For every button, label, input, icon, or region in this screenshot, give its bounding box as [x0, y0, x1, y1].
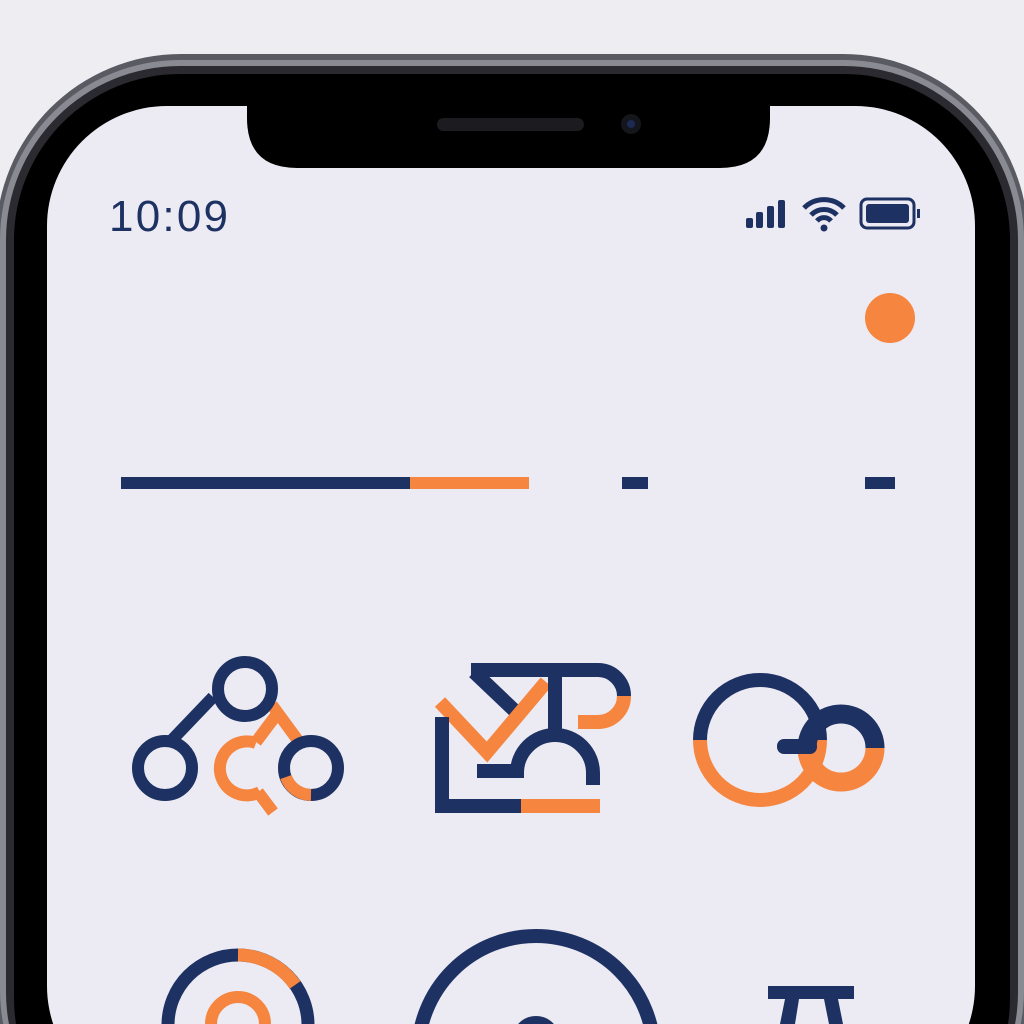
icon: envelope / balance: [440, 670, 624, 806]
icon: pi stool: [768, 986, 854, 1024]
time: 10:09: [109, 192, 228, 241]
icon: linked circles: [700, 680, 875, 800]
icon: network nodes: [138, 662, 338, 812]
icon: large circle: [418, 936, 654, 1024]
progress line: [121, 477, 895, 489]
status icons: [746, 199, 920, 232]
orange dot: [865, 293, 915, 343]
speaker and camera: [437, 114, 641, 134]
notch: [247, 100, 770, 168]
icon: target: [168, 955, 308, 1024]
